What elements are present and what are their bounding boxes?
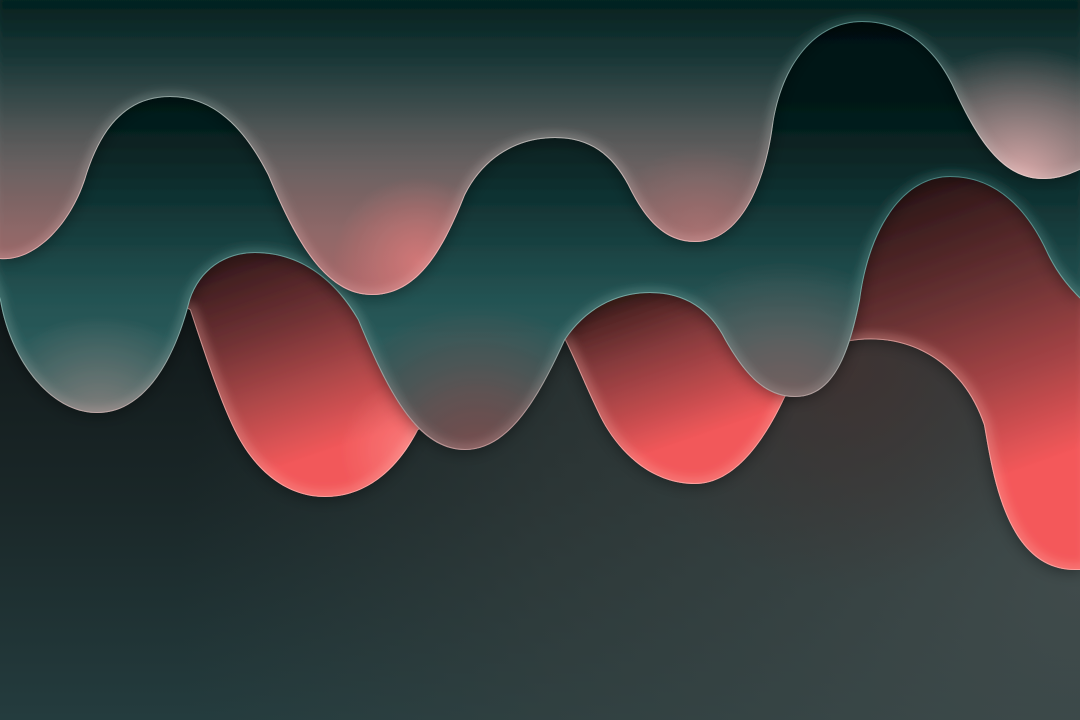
grey-pink top wave layer [0, 0, 1080, 300]
teal wave layer [0, 0, 1080, 460]
red wave layer [188, 177, 1080, 576]
